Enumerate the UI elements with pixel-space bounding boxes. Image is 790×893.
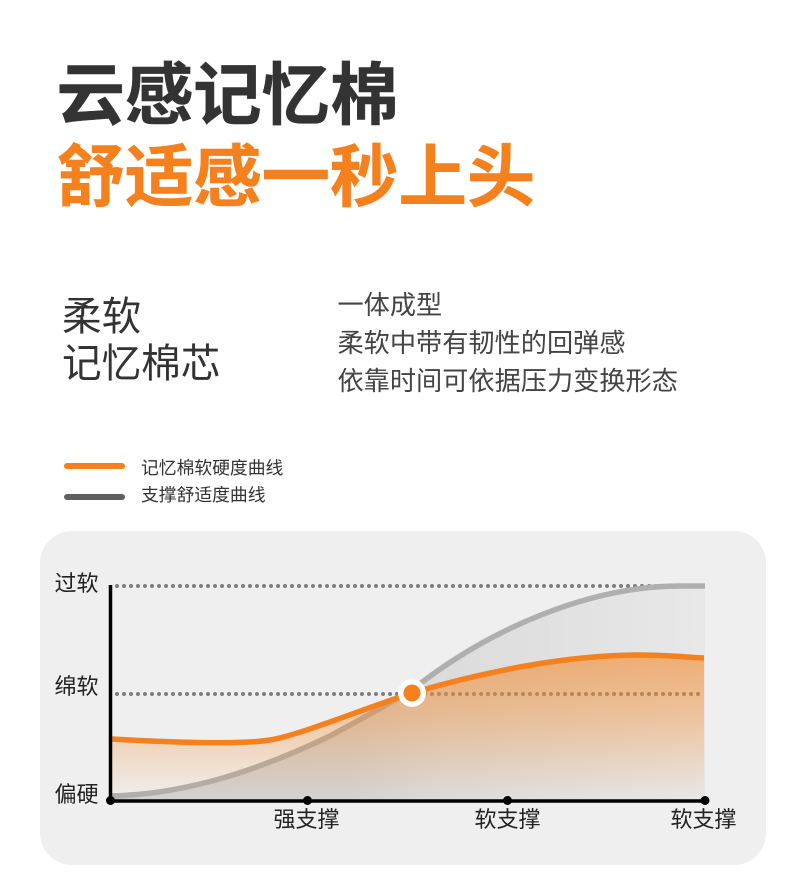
y axis labels: 偏硬 [54, 782, 99, 807]
area under support comfort curve [112, 586, 705, 800]
support comfort curve [112, 586, 705, 796]
panel: chart background [40, 531, 766, 865]
title [56, 58, 535, 216]
legend: orange curve [64, 458, 283, 478]
dotted guide lines [117, 586, 703, 694]
description text: 柔软中带有韧性的回弹感 [338, 328, 626, 358]
description text [338, 290, 678, 396]
chart [54, 571, 737, 832]
softness curve [112, 655, 704, 743]
legend: orange curve: 记忆棉软硬度曲线 [141, 458, 283, 478]
axes [110, 585, 705, 801]
y axis labels: 过软 [54, 571, 99, 596]
heading: soft memory foam core: 记忆棉芯 [62, 342, 220, 386]
legend: gray curve [64, 485, 266, 505]
x axis labels [273, 807, 737, 832]
heading: soft memory foam core [62, 295, 220, 386]
y axis labels: 绵软 [54, 674, 99, 699]
title line 2: 舒适感一秒上头 [56, 140, 535, 216]
axis tick dots [106, 796, 710, 805]
intersection marker [398, 679, 426, 707]
description text: 一体成型 [338, 290, 442, 320]
x axis labels: 软支撑 [670, 807, 737, 832]
title line 1: 云感记忆棉 [56, 58, 398, 134]
x axis labels: 强支撑 [273, 807, 340, 832]
description text: 依靠时间可依据压力变换形态 [338, 366, 678, 396]
area under softness curve [112, 655, 704, 800]
heading: soft memory foam core: 柔软 [62, 295, 141, 339]
legend [64, 458, 283, 505]
x axis labels: 软支撑 [474, 807, 541, 832]
legend: gray curve: 支撑舒适度曲线 [141, 485, 266, 505]
y axis labels [54, 571, 99, 807]
